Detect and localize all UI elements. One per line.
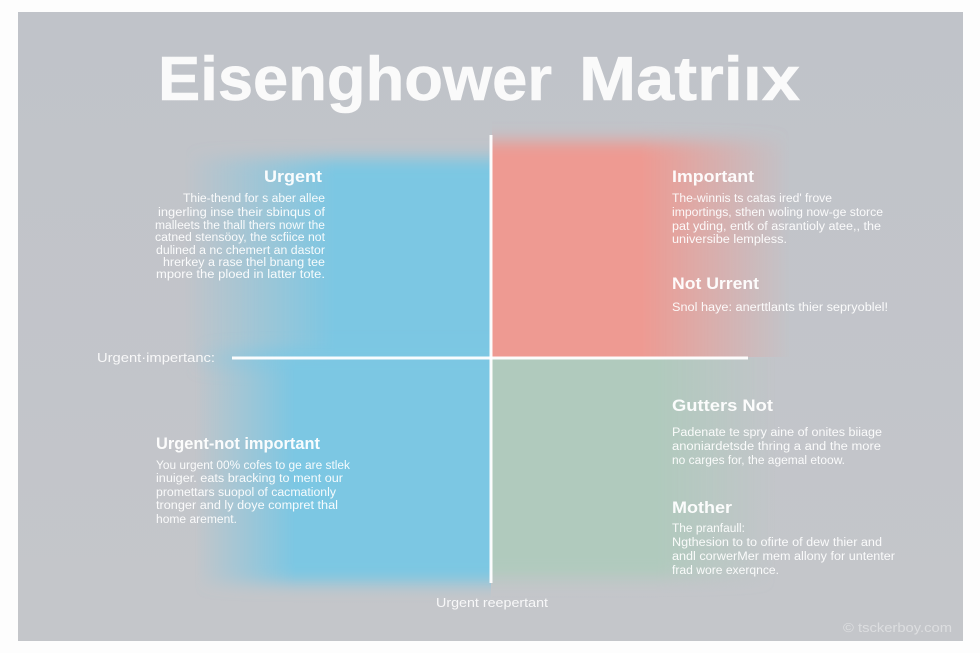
body: gutters not: Padenate te spry aine of onites biiage xyxy=(672,427,882,439)
body: mother: Ngthesion to to ofirte of dew thier and xyxy=(672,537,882,549)
body: gutters not: anoniardetsde thring a and the more xyxy=(672,441,881,453)
body: not urrent: Snol haye: anerttlants thier sepryoblel! xyxy=(672,302,888,314)
vertical axis line xyxy=(490,135,492,583)
body: urgent: catned stensöoy, the scfiice not xyxy=(155,232,326,244)
body: urgent-not important: inuiger. eats bracking to ment our xyxy=(156,473,343,485)
body: urgent: ingerling inse their sbinqus of xyxy=(158,207,326,219)
axis label: left: Urgent·impertanc: xyxy=(97,350,215,365)
body: urgent-not important: home arement. xyxy=(156,514,237,526)
title: Matriıx xyxy=(579,45,801,114)
title xyxy=(158,45,801,114)
body: urgent-not important: tronger and ly doye compret thal xyxy=(156,500,338,512)
text block: important xyxy=(672,167,883,246)
body: mother: frad wore exerqnce. xyxy=(672,565,779,577)
text block: gutters not xyxy=(672,396,882,467)
body: urgent xyxy=(155,193,326,281)
body: urgent: Thie-thend for s aber allee xyxy=(183,193,325,205)
horizontal axis line xyxy=(232,356,748,360)
panel: not urgent green quadrant xyxy=(492,360,727,580)
body: urgent: mpore the ploed in latter tote. xyxy=(156,269,325,281)
watermark: © tsckerboy.com xyxy=(843,620,952,635)
heading: urgent-not important: Urgent-not important xyxy=(156,434,320,453)
heading: gutters not: Gutters Not xyxy=(672,396,773,415)
body: important xyxy=(672,193,883,246)
body: important: universibe lempless. xyxy=(672,234,787,246)
panel: urgent blue quadrants xyxy=(185,158,515,583)
text block: urgent xyxy=(155,167,326,281)
body: urgent: dulined a nc chemert an dastor xyxy=(156,245,325,257)
text block: urgent-not important xyxy=(156,434,350,526)
panel: important red quadrant xyxy=(492,132,770,357)
axis label: bottom: Urgent reepertant xyxy=(436,595,548,610)
body: important: pat yding, entk of asrantioly atee,, the xyxy=(672,221,881,233)
body: urgent-not important: promettars suopol of cacmationly xyxy=(156,487,336,499)
heading: important: Important xyxy=(672,167,754,186)
body: gutters not: no carges for, the agemal etoow. xyxy=(672,455,845,467)
body: important: importings, sthen woling now-ge storce xyxy=(672,207,883,219)
body: urgent-not important: You urgent 00% cofes to ge are stlek xyxy=(156,460,350,472)
heading: mother: Mother xyxy=(672,498,732,517)
body: important: The-winnis ts catas ired' frove xyxy=(672,193,832,205)
text block: not urrent xyxy=(672,274,888,314)
body: mother: andl corwerMer mem allony for untenter xyxy=(672,551,895,563)
text block: mother xyxy=(672,498,895,577)
body: urgent-not important xyxy=(156,460,350,526)
body: mother xyxy=(672,523,895,577)
title: Eisenghower xyxy=(158,45,552,114)
body: gutters not xyxy=(672,427,882,467)
heading: urgent: Urgent xyxy=(264,167,322,186)
body: urgent: malleets the thall thers nowr the xyxy=(155,220,325,232)
heading: not urrent: Not Urrent xyxy=(672,274,759,293)
body: urgent: hrerkey a rase thel bnang tee xyxy=(163,257,325,269)
body: mother: The pranfaull: xyxy=(672,523,745,535)
